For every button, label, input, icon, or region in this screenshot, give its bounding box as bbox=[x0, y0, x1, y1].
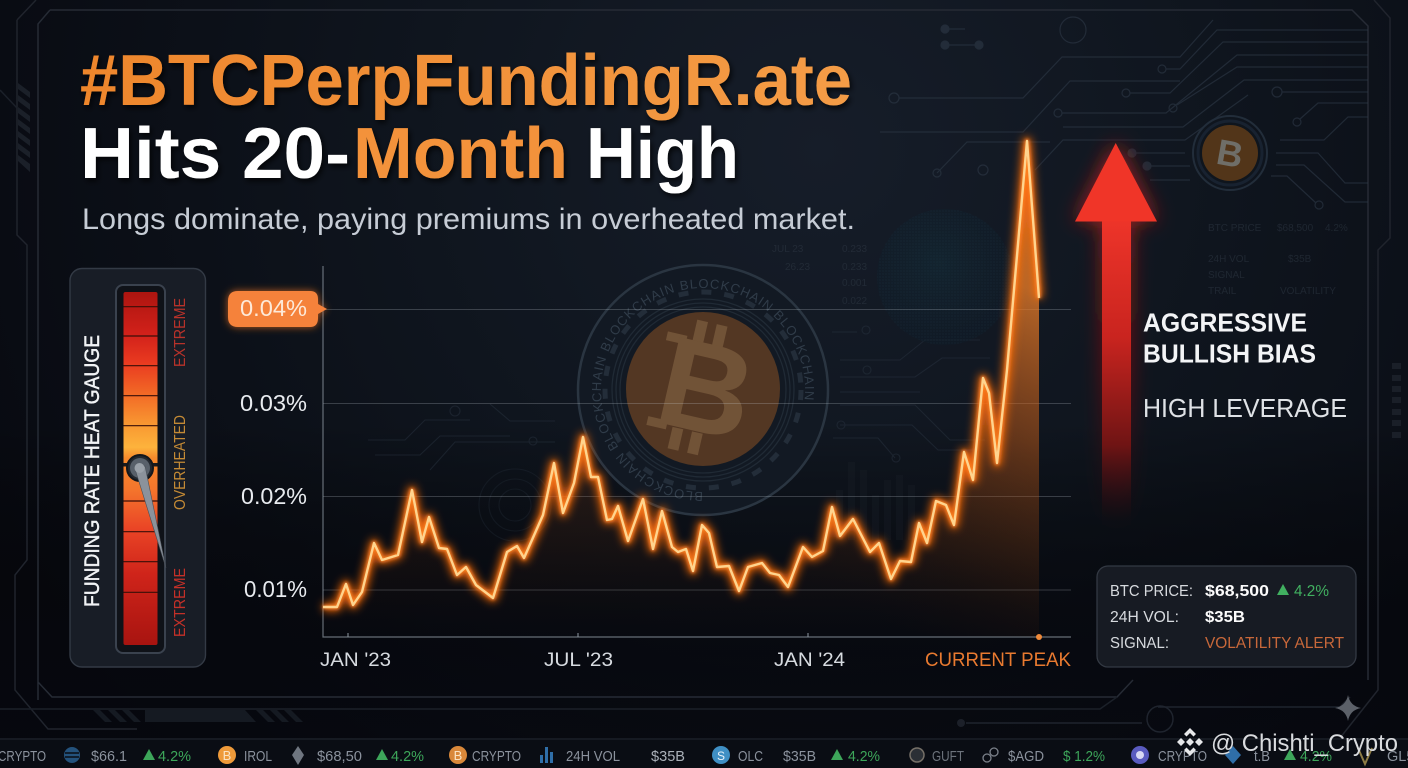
chart bbox=[228, 141, 1071, 671]
title line 2 white end: High bbox=[586, 114, 739, 194]
icon: ticker link bbox=[983, 748, 998, 762]
ticker bar: 4.2% bbox=[848, 749, 880, 765]
icon: ticker coin orange: B bbox=[223, 748, 231, 763]
faint background data table: 0.001 bbox=[842, 278, 867, 289]
ticker bar: $66.1 bbox=[91, 749, 127, 765]
background globe bbox=[877, 209, 1013, 345]
ticker bar bbox=[0, 740, 1408, 768]
faint background data table: TRAIL bbox=[1208, 286, 1237, 297]
faint background bars bbox=[836, 462, 915, 540]
ticker bar: CRYPTO bbox=[1158, 749, 1207, 765]
panel: market stats: 24H VOL: bbox=[1110, 609, 1179, 626]
area under curve bbox=[323, 141, 1039, 637]
watermark: @ Chishti_Crypto bbox=[1211, 730, 1398, 757]
x-axis labels: CURRENT PEAK bbox=[925, 649, 1071, 671]
background bitcoin coin: B bbox=[645, 309, 767, 469]
title bbox=[80, 41, 852, 194]
small bitcoin coin top right: B bbox=[1214, 131, 1246, 176]
icon: binance mark bbox=[1177, 728, 1203, 756]
callout: 0.04% current level bbox=[228, 291, 327, 327]
ticker bar: IROL bbox=[244, 749, 272, 765]
icon: ticker coin grey bbox=[910, 748, 924, 762]
x-axis labels: JAN '24 bbox=[774, 649, 845, 671]
gauge needle bbox=[127, 455, 166, 568]
gauge zone labels: EXTREME bbox=[172, 298, 189, 367]
x-axis labels: JUL '23 bbox=[544, 649, 613, 671]
subtitle: Longs dominate, paying premiums in overheated market. bbox=[82, 203, 855, 236]
x-axis labels: JAN '23 bbox=[320, 649, 391, 671]
icon: ticker V mark bbox=[1358, 748, 1372, 764]
faint background data table: JUL 23 bbox=[772, 244, 804, 255]
faint background data table: 24H VOL bbox=[1208, 254, 1250, 265]
ticker bar: OLC bbox=[738, 749, 763, 765]
y-axis labels: 0.03% bbox=[240, 390, 307, 416]
icon: ticker coin light blue bbox=[712, 746, 730, 764]
gauge zone labels: OVERHEATED bbox=[172, 415, 189, 510]
icon: ticker coin orange bbox=[218, 746, 236, 764]
ticker bar: $AGD bbox=[1008, 749, 1044, 765]
icon: ticker ethereum bbox=[292, 746, 304, 765]
faint background data table: VOLATILITY bbox=[1280, 286, 1336, 297]
ticker bar: 4.2% bbox=[1300, 749, 1332, 765]
panel: market stats: 4.2% bbox=[1294, 583, 1329, 600]
y-axis labels: 0.02% bbox=[241, 483, 307, 509]
panel: market stats: $68,500 bbox=[1205, 583, 1269, 600]
faint background data table: 0.022 bbox=[842, 296, 867, 307]
title line 2 highlight: Month bbox=[353, 114, 568, 194]
funding rate glowing line bbox=[323, 141, 1039, 607]
title line 1: #BTCPerpFundingR.ate bbox=[80, 41, 852, 121]
faint background data table: 0.233 bbox=[842, 262, 867, 273]
gauge title: FUNDING RATE HEAT GAUGE bbox=[81, 335, 104, 607]
faint background data table: SIGNAL bbox=[1208, 270, 1245, 281]
panel: market stats bbox=[1097, 566, 1356, 667]
y-axis labels: 0.01% bbox=[244, 576, 307, 602]
background circuit lines top right bbox=[880, 17, 1368, 209]
grid lines bbox=[323, 310, 1071, 590]
small bitcoin coin top right bbox=[1193, 116, 1267, 190]
ticker bar: t.B bbox=[1254, 749, 1270, 765]
title line 2 white start: Hits 20- bbox=[80, 114, 350, 194]
gauge track bbox=[116, 285, 165, 653]
callout: bias text: AGGRESSIVE bbox=[1143, 308, 1307, 338]
icon: ticker diamond blue bbox=[1225, 746, 1241, 764]
icon: ticker coin purple bbox=[1131, 746, 1149, 764]
callout: 0.04% current level: 0.04% bbox=[240, 295, 307, 321]
icon: ticker coin blue bbox=[64, 747, 80, 763]
faint background data table: 0.233 bbox=[842, 244, 867, 255]
y-axis labels bbox=[240, 390, 307, 602]
ticker bar: 24H VOL bbox=[566, 749, 620, 765]
faint background data table: $35B bbox=[1288, 254, 1312, 265]
ticker bar: $35B bbox=[783, 749, 816, 765]
background bitcoin coin: BLOCKCHAIN BLOCKCHAIN BLOCKCHAIN BLOCKCHAIN BLOCKCHAIN bbox=[592, 279, 814, 501]
axes bbox=[323, 266, 1071, 637]
callout: bias text: HIGH LEVERAGE bbox=[1143, 393, 1347, 423]
gauge zone labels: EXTREME bbox=[172, 568, 189, 637]
faint background data table bbox=[772, 223, 1348, 307]
panel: market stats: VOLATILITY ALERT bbox=[1205, 635, 1345, 652]
arrow: red bullish arrow bbox=[1075, 143, 1157, 525]
gauge zone labels bbox=[172, 298, 189, 637]
background circuit lines centre bbox=[368, 326, 990, 541]
panel: funding rate heat gauge bbox=[70, 268, 206, 667]
icon: ticker coin orange 2: B bbox=[454, 748, 462, 763]
panel: market stats: $35B bbox=[1205, 609, 1245, 626]
ticker bar: $35B bbox=[651, 749, 685, 765]
icon: ticker coin light blue: S bbox=[717, 749, 725, 763]
panel: market stats: SIGNAL: bbox=[1110, 635, 1169, 652]
faint background data table: 4.2% bbox=[1325, 223, 1348, 234]
callout: bias text bbox=[1143, 308, 1347, 423]
ticker bar: 4.2% bbox=[158, 749, 191, 765]
icon: ticker volume bars bbox=[540, 747, 553, 763]
faint background data table: $68,500 bbox=[1277, 223, 1314, 234]
faint background data table: 26.23 bbox=[785, 262, 810, 273]
faint background data table: BTC PRICE bbox=[1208, 223, 1262, 234]
ticker bar: GUFT bbox=[932, 749, 964, 765]
ticker bar: 4.2% bbox=[391, 749, 424, 765]
ticker bar: $ 1.2% bbox=[1063, 749, 1105, 765]
panel: market stats: BTC PRICE: bbox=[1110, 583, 1193, 600]
ticker bar: $68,50 bbox=[317, 749, 362, 765]
axis ticks and current peak marker bbox=[348, 633, 1042, 640]
callout: bias text: BULLISH BIAS bbox=[1143, 338, 1316, 368]
ticker bar: CRYPTO bbox=[472, 749, 521, 765]
icon: ticker coin orange 2 bbox=[449, 746, 467, 764]
x-axis labels bbox=[320, 649, 1071, 671]
icon: sparkle bbox=[1335, 695, 1361, 721]
